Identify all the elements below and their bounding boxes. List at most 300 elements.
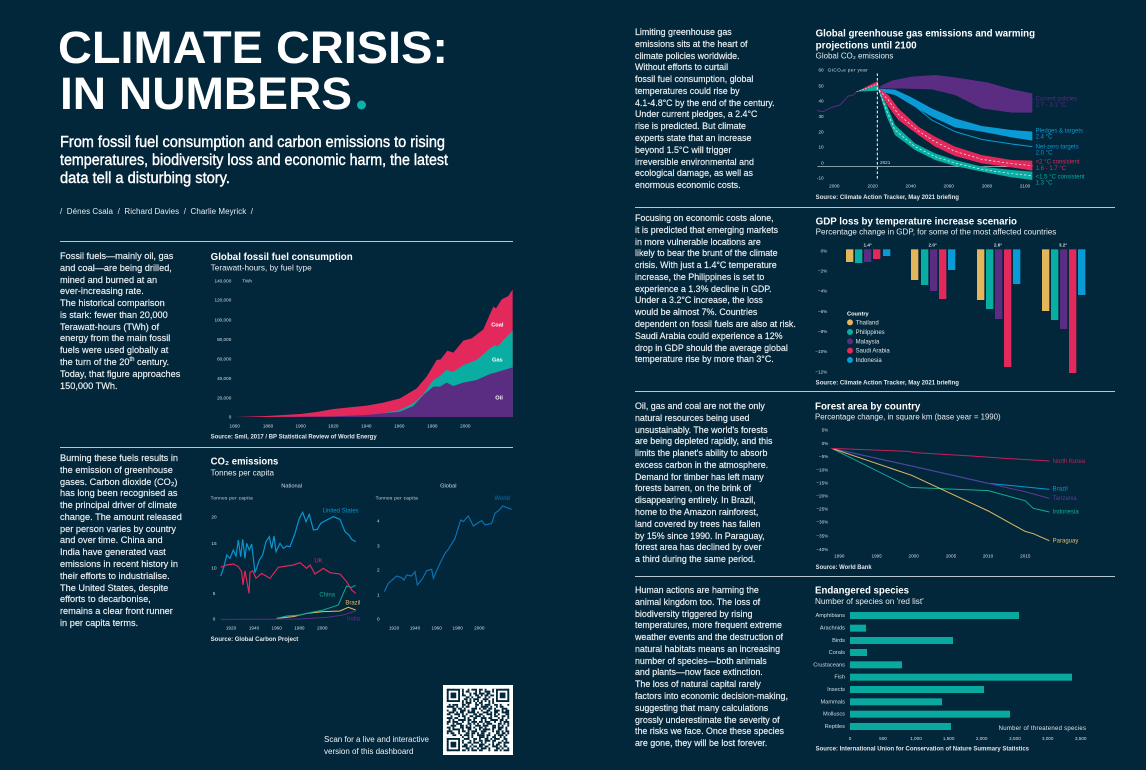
text block: limiting emissions: emissions sits at the heart of	[635, 39, 747, 49]
text block: limiting emissions: irreversible environmental and	[635, 157, 754, 167]
text block: burning fuels: gases. Carbon dioxide (CO₂)	[60, 477, 177, 487]
y axis labels: −5%	[819, 454, 828, 459]
x axis labels: 2,500	[1009, 736, 1021, 741]
bars	[850, 612, 1072, 730]
text block: fossil fuels: The historical comparison	[60, 298, 165, 308]
text block: animal kingdom: are gone, they will be lost forever.	[635, 738, 767, 748]
QR caption: Scan for a live and interactive	[324, 735, 429, 744]
axis labels: 2000	[317, 626, 328, 631]
text block: forests: unsustainably. The world's forests	[635, 425, 768, 435]
y axis labels: −35%	[816, 534, 828, 539]
text block: limiting emissions: climate policies worldwide.	[635, 51, 740, 61]
y axis labels: −25%	[816, 507, 828, 512]
chart subtitle: Terawatt-hours, by fuel type	[211, 262, 312, 272]
y axis labels: 60,000	[217, 357, 232, 362]
text block: economic costs: Under a 3.2°C increase, the loss	[635, 295, 763, 305]
text block: burning fuels: efforts to decarbonise,	[60, 594, 151, 604]
historic emissions line	[817, 92, 857, 112]
x axis labels: 1,000	[910, 736, 922, 741]
source: Source: International Union for Conservation of Nature Summary Statistics	[816, 746, 1029, 753]
category labels: Mammals	[820, 700, 845, 706]
panel: endangered species	[634, 585, 1087, 753]
x axis labels: 2010	[983, 554, 994, 559]
text block: limiting emissions: experts state that an increase	[635, 133, 751, 143]
y axis labels	[817, 68, 824, 181]
historic range fan	[857, 81, 879, 92]
category labels: Insects	[827, 687, 845, 693]
category labels: Crustaceans	[813, 663, 845, 669]
y axis labels: 100,000	[214, 317, 232, 322]
text block: fossil fuels: Today, that figure approaches	[60, 369, 180, 379]
text block: burning fuels: Burning these fuels results in	[60, 453, 178, 463]
y axis labels: TWh	[242, 278, 252, 283]
bars: 2.0 degrees	[911, 249, 955, 299]
panel: global fossil fuel consumption	[60, 251, 513, 441]
text block: forests: disappearing entirely. In Brazil,	[635, 495, 756, 505]
text block: burning fuels: in per capita terms.	[60, 618, 138, 628]
scenario labels	[863, 243, 1067, 248]
text block: limiting emissions: Limiting greenhouse gas	[635, 27, 732, 37]
text block: burning fuels: their efforts to industrialise.	[60, 571, 170, 581]
x axis labels: 2000	[908, 554, 919, 559]
x axis labels: 1995	[871, 554, 882, 559]
axis labels: 1920	[389, 626, 400, 631]
axis units	[211, 496, 418, 501]
y axis unit: GtCO₂e per year	[828, 68, 868, 73]
y axis labels: 0	[821, 160, 824, 165]
scenario labels: Net-zero targets	[1036, 144, 1079, 150]
text block: fossil fuels: the turn of the 20th century.	[60, 357, 169, 367]
text block: economic costs: crisis. With just a 1.4°C temperature	[635, 260, 777, 270]
chart heading	[816, 29, 1035, 52]
line: Brazil	[832, 448, 1049, 489]
text block: forests: natural resources being used	[635, 413, 749, 423]
axis units: Tonnes per capita	[376, 496, 418, 501]
x axis labels: 2080	[982, 184, 993, 189]
x axis labels: 2005	[946, 554, 957, 559]
projection chart	[816, 29, 1085, 201]
series labels: Coal	[491, 322, 504, 328]
x axis title: Number of threatened species	[999, 726, 1086, 732]
y axis labels: 10	[818, 145, 824, 150]
y axis labels: 40	[818, 99, 824, 104]
panel: greenhouse gas emissions and warming projections	[635, 27, 1085, 201]
band: below 2 degrees	[879, 88, 1032, 171]
axis labels: 10	[211, 565, 217, 570]
chart subtitle: Percentage change in GDP, for some of the most affected countries	[816, 227, 1056, 237]
text block: animal kingdom: number of species—both animals	[635, 656, 767, 666]
vertical marker 2021	[876, 73, 879, 181]
scenario labels: 2.0°	[928, 243, 937, 248]
dashed centre lines	[879, 90, 1032, 176]
x axis labels: 2000	[460, 423, 471, 428]
bars: 2.6 degrees	[977, 249, 1020, 367]
source: Source: World Bank	[816, 564, 872, 571]
line labels: China	[319, 593, 336, 599]
text block: animal kingdom: suggesting that many calculations	[635, 703, 768, 713]
line labels: India	[347, 616, 361, 622]
text block: animal kingdom: and plants—now face extinction.	[635, 667, 763, 677]
y axis labels: −15%	[816, 480, 828, 485]
axis labels: 1940	[410, 626, 421, 631]
line: World	[384, 506, 512, 592]
text block: economic costs: would be almost 7%. Countries	[635, 307, 757, 317]
chart heading: GDP loss by temperature increase scenario	[816, 217, 1017, 228]
title: CLIMATE CRISIS:	[58, 22, 448, 73]
scenario labels: 2.0 °C	[1036, 151, 1053, 157]
grouped bar chart	[815, 217, 1086, 387]
text block: fossil fuels: ever-increasing rate.	[60, 286, 144, 296]
text block: animal kingdom: weather events and the destruction of	[635, 632, 783, 642]
axis labels: 0	[377, 617, 380, 622]
text block: burning fuels: and over time. China and	[60, 535, 163, 545]
bars: 3.2 degrees	[1042, 249, 1085, 373]
text block: limiting emissions: Under current pledges, a 2.4°C	[635, 109, 757, 119]
line labels: UK	[314, 559, 323, 565]
line: Indonesia	[832, 448, 1049, 512]
line: China	[277, 585, 356, 618]
legend: Saudi Arabia	[856, 349, 890, 355]
series labels: Gas	[492, 357, 503, 363]
band: current policies	[879, 75, 1032, 113]
text block: economic costs: likely to bear the brunt of the climate	[635, 248, 778, 258]
text block: economic costs	[634, 213, 796, 364]
y axis labels: 5%	[822, 428, 828, 433]
text block: fossil fuels: energy from the main fossil	[60, 333, 170, 343]
panel: forest area	[635, 401, 1086, 571]
x axis labels: 2100	[1020, 184, 1031, 189]
text block: economic costs: drop in GDP should the average global	[635, 343, 788, 353]
legend: Thailand	[856, 320, 879, 326]
text block: forests: by 15% since 1990. In Paraguay,	[635, 531, 765, 541]
text block: animal kingdom: factors into economic decision-making,	[635, 691, 788, 701]
source: Source: Smil, 2017 / BP Statistical Review of World Energy	[211, 434, 377, 441]
chart heading: projections until 2100	[816, 41, 917, 52]
band: pledges and targets	[879, 89, 1032, 141]
text block: forests: excess carbon in the atmosphere.	[635, 460, 768, 470]
series labels	[491, 322, 504, 402]
axis labels: 1980	[294, 626, 305, 631]
text block: economic costs: increase, the Philippines is set to	[635, 272, 764, 282]
text block: forests	[635, 401, 772, 564]
x axis labels: 3,000	[1042, 736, 1054, 741]
line labels	[314, 496, 510, 622]
text block: forests: a third during the same period.	[635, 554, 755, 564]
text block: limiting emissions: Without efforts to curtail	[635, 62, 728, 72]
x axis labels	[829, 184, 1031, 189]
line labels: United States	[323, 508, 359, 514]
text block: limiting emissions: temperatures could rise by	[635, 86, 740, 96]
text block: limiting emissions: ecological damage, as well as	[635, 168, 753, 178]
line labels: Tanzania	[1053, 496, 1077, 502]
y axis labels: 50	[818, 84, 824, 89]
area: coal	[234, 289, 513, 417]
text block: fossil fuels: mined and burned at an	[60, 275, 157, 285]
scenario labels: Pledges & targets	[1036, 128, 1083, 134]
text block: animal kingdom: biodiversity triggered by rising	[635, 609, 752, 619]
category labels: Amphibians	[815, 613, 845, 619]
text block: burning fuels: The United States, despite	[60, 583, 168, 593]
axis labels: 1980	[452, 626, 463, 631]
y axis labels: −8%	[818, 329, 827, 334]
category labels: Reptiles	[825, 724, 845, 730]
chart heading: Global greenhouse gas emissions and warming	[816, 29, 1035, 40]
chart subtitle: Tonnes per capita	[211, 467, 274, 477]
QR caption	[324, 735, 429, 756]
y axis labels	[816, 428, 828, 552]
text block: burning fuels: the principal driver of climate	[60, 500, 177, 510]
text block: fossil fuels: Fossil fuels—mainly oil, gas	[60, 251, 173, 261]
y axis labels: 60	[818, 68, 824, 73]
text block: fossil fuels: fuels were used globally at	[60, 345, 168, 355]
chart subtitle: Global CO₂ emissions	[816, 51, 893, 61]
scenario labels: 2.6°	[994, 243, 1002, 248]
x axis labels: 500	[879, 736, 887, 741]
source: Source: Climate Action Tracker, May 2021 briefing	[816, 380, 959, 387]
y axis labels: −10%	[816, 468, 828, 473]
x axis labels: 1960	[394, 423, 405, 428]
scenario labels: 2.7 - 3.1 °C	[1036, 103, 1067, 109]
y axis labels: 0%	[821, 248, 827, 253]
y axis labels: 120,000	[214, 298, 232, 303]
text block: economic costs: experience a 1.3% decline in GDP.	[635, 284, 772, 294]
zero line	[817, 166, 1032, 168]
text block: limiting emissions: 4.1-4.8°C by the end of the century.	[635, 98, 775, 108]
legend: Philippines	[856, 330, 885, 336]
text block: animal kingdom: natural habitats means an increasing	[635, 644, 780, 654]
category labels: Fish	[834, 675, 845, 681]
y axis labels: −6%	[818, 309, 827, 314]
y axis labels: -10	[817, 176, 824, 181]
source: Source: Climate Action Tracker, May 2021 briefing	[816, 194, 959, 201]
y axis labels: −4%	[818, 289, 827, 294]
line labels: World	[494, 496, 510, 502]
x axis labels: 2020	[867, 184, 878, 189]
y axis labels: 40,000	[217, 376, 232, 381]
legend: Indonesia	[856, 358, 882, 364]
text block: forests: forests barren, on the brink of	[635, 483, 751, 493]
legend	[847, 311, 890, 364]
text block: limiting emissions: rise is predicted. But climate	[635, 121, 746, 131]
line: India	[221, 611, 356, 619]
text block: animal kingdom: grossly underestimate the severity of	[635, 715, 780, 725]
text block: animal kingdom: animal kingdom too. The loss of	[635, 597, 760, 607]
x axis labels: 3,500	[1075, 736, 1087, 741]
text block: fossil fuels: and coal—are being drilled,	[60, 263, 172, 273]
text block: burning fuels: the emission of greenhouse	[60, 465, 173, 475]
QR caption: version of this dashboard	[324, 747, 413, 756]
y axis labels	[214, 278, 252, 420]
marker label: 2021	[880, 160, 891, 165]
text block: burning fuels: has long been recognised as	[60, 488, 177, 498]
line labels: Indonesia	[1053, 510, 1079, 516]
subtitle: data tell a disturbing story.	[60, 170, 230, 187]
text block: animal kingdom: temperatures, more frequent extreme	[635, 620, 782, 630]
y axis labels: −2%	[818, 269, 827, 274]
scenario labels: Current policies	[1036, 96, 1077, 102]
category labels: Arachnids	[820, 626, 845, 632]
line chart	[815, 402, 1086, 571]
title: IN NUMBERS	[60, 68, 352, 119]
horizontal bar chart	[813, 586, 1087, 753]
x axis labels: 2,000	[976, 736, 988, 741]
y axis labels: −20%	[816, 494, 828, 499]
line: United States	[221, 512, 356, 576]
y axis labels: 20,000	[217, 395, 232, 400]
y axis labels: 20	[818, 129, 824, 134]
text block: limiting emissions	[635, 27, 775, 190]
text block: forests: are being depleted rapidly, and this	[635, 436, 772, 446]
area: gas	[367, 331, 513, 417]
axis labels: 0	[213, 617, 216, 622]
category labels: Molluscs	[823, 712, 845, 718]
category labels: Corals	[829, 650, 845, 656]
x axis labels: 2060	[943, 184, 954, 189]
line labels	[1053, 459, 1086, 544]
bars: 1.4 degrees	[846, 249, 890, 263]
line labels: Paraguay	[1053, 538, 1078, 544]
axis labels: 1920	[226, 626, 237, 631]
text block: economic costs: in more vulnerable locations are	[635, 237, 761, 247]
y axis labels: 140,000	[214, 278, 232, 283]
legend: Malaysia	[856, 339, 880, 345]
text block: economic costs: temperature rise by more than 3°C.	[635, 354, 774, 364]
line labels: Brazil	[1053, 487, 1068, 493]
text block: burning fuels: remains a clear front runner	[60, 606, 173, 616]
text block: limiting emissions: enormous economic costs.	[635, 180, 741, 190]
text block: forests: limits the planet's ability to absorb	[635, 448, 767, 458]
area: oil	[267, 367, 513, 417]
x axis labels: 1980	[427, 423, 438, 428]
text block: forests: Oil, gas and coal are not the only	[635, 401, 765, 411]
line: North Korea	[832, 448, 1049, 461]
line: Brazil	[277, 607, 356, 618]
x axis labels: 2040	[905, 184, 916, 189]
panel: GDP loss	[634, 213, 1086, 387]
text block: limiting emissions: fossil fuel consumption, global	[635, 74, 753, 84]
scenario labels	[1036, 96, 1085, 187]
line: Tanzania	[832, 448, 1049, 498]
header: title, subtitle and authors	[58, 22, 449, 216]
scenario labels: <2 °C consistent	[1036, 160, 1080, 166]
subtitle	[60, 134, 449, 187]
text block: burning fuels: emissions in recent history in	[60, 559, 178, 569]
x axis labels: 1900	[295, 423, 306, 428]
category labels: Birds	[832, 638, 845, 644]
stacked area chart: fuel consumption	[210, 252, 513, 441]
chart subtitle: Number of species on 'red list'	[815, 596, 924, 606]
text block: fossil fuels: Terawatt-hours (TWh) of	[60, 322, 159, 332]
scenario labels: 2.4 °C	[1036, 135, 1053, 141]
series labels: Oil	[495, 396, 503, 402]
text block: animal kingdom: The loss of natural capital rarely	[635, 679, 761, 689]
text block: forests: forest area has declined by over	[635, 542, 761, 552]
text block: economic costs: dependent on fossil fuels are also at risk.	[635, 319, 796, 329]
text block: fossil fuels	[60, 251, 180, 391]
text block: animal kingdom	[634, 585, 788, 748]
scenario labels: <1.5 °C consistent	[1036, 174, 1085, 180]
source: Source: Global Carbon Project	[211, 636, 299, 643]
y axis labels	[815, 248, 827, 374]
title	[58, 22, 448, 119]
text block: fossil fuels: 150,000 TWh.	[60, 381, 118, 391]
category labels	[813, 613, 845, 730]
x axis labels: 1860	[229, 423, 240, 428]
axis labels: 20	[211, 514, 217, 519]
legend: Country	[847, 311, 870, 317]
chart heading: CO₂ emissions	[211, 457, 279, 468]
chart heading: Global fossil fuel consumption	[211, 252, 353, 263]
text block: economic costs: Saudi Arabia could experience a 12%	[635, 331, 783, 341]
axis units: Tonnes per capita	[211, 496, 253, 501]
axis labels: 5	[213, 591, 216, 596]
axis labels: 2000	[474, 626, 485, 631]
y axis labels: −40%	[816, 547, 828, 552]
text block: burning fuels: change. The amount released	[60, 512, 182, 522]
icon: QR code	[443, 685, 513, 755]
small multiple titles: Global	[440, 484, 457, 490]
line: net-zero targets	[880, 92, 1032, 147]
scenario labels: 1.4°	[863, 243, 872, 248]
chart heading: Forest area by country	[815, 402, 921, 413]
axis labels: 2	[377, 568, 380, 573]
subtitle: From fossil fuel consumption and carbon emissions to rising	[60, 134, 445, 151]
axis labels: 1	[377, 593, 380, 598]
text block: forests: home to the Amazon rainforest,	[635, 507, 758, 517]
y axis labels: −10%	[815, 349, 827, 354]
axis labels: 1960	[271, 626, 282, 631]
axis labels: 4	[377, 519, 380, 524]
text block: economic costs: Focusing on economic costs alone,	[635, 213, 774, 223]
text block: animal kingdom: the risks we face. Once these species	[635, 726, 784, 736]
axis labels: 1960	[431, 626, 442, 631]
line labels: North Korea	[1053, 459, 1086, 465]
x axis labels: 1940	[361, 423, 372, 428]
text block: forests: land covered by trees has fallen	[635, 519, 760, 529]
y axis labels: 0	[229, 415, 232, 420]
line labels: Brazil	[345, 601, 360, 607]
x axis labels: 1990	[834, 554, 845, 559]
axis labels: 1940	[249, 626, 260, 631]
x axis labels: 2000	[829, 184, 840, 189]
axis labels: 3	[377, 543, 380, 548]
chart subtitle: Percentage change, in square km (base year = 1990)	[815, 412, 1001, 422]
x axis labels	[229, 423, 471, 428]
text block: burning fuels: per person varies by country	[60, 524, 176, 534]
x axis labels: 1,500	[943, 736, 955, 741]
y axis labels: −12%	[815, 369, 827, 374]
text block: forests: Demand for timber has left many	[635, 472, 764, 482]
x axis labels: 1920	[328, 423, 339, 428]
y axis labels: 30	[818, 114, 824, 119]
y axis labels: −30%	[816, 520, 828, 525]
line: Paraguay	[832, 448, 1049, 541]
line: UK	[221, 563, 356, 593]
authors: / Dénes Csala / Richard Davies / Charlie Meyrick /	[60, 207, 254, 216]
scenario labels: 3.2°	[1059, 243, 1067, 248]
line charts: tonnes per capita	[210, 457, 512, 643]
x axis labels: 0	[849, 736, 852, 741]
scenario labels: 1.3 °C	[1036, 181, 1053, 187]
band: below 1.5 degrees	[879, 90, 1032, 180]
x axis labels	[834, 554, 1031, 559]
y axis labels: 80,000	[217, 337, 232, 342]
x axis labels: 2015	[1020, 554, 1031, 559]
text block: economic costs: it is predicted that emerging markets	[635, 225, 778, 235]
subtitle: temperatures, biodiversity loss and economic harm, the latest	[60, 152, 449, 169]
text block: burning fuels: India have generated vast	[60, 547, 166, 557]
text block: fossil fuels: is stark: fewer than 20,000	[60, 310, 168, 320]
